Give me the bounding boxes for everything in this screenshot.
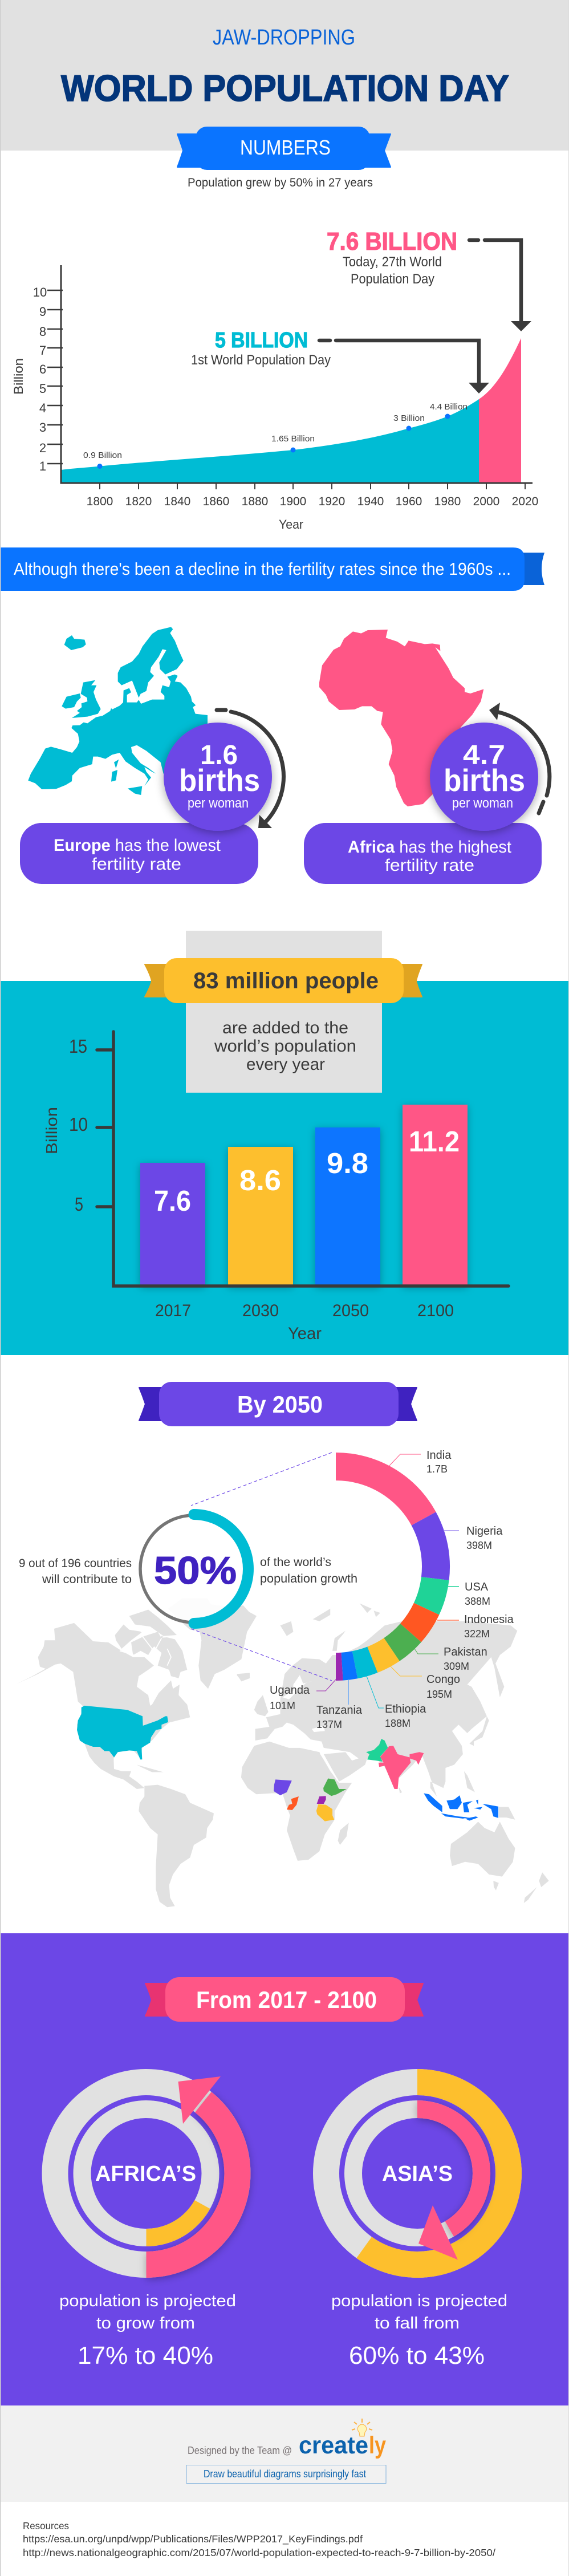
y labels: 9	[39, 305, 46, 319]
gray text card: are added to the	[222, 1019, 348, 1037]
country: nigeria	[274, 1779, 292, 1795]
bar: 2030: 8.6	[239, 1164, 281, 1196]
y labels: 7	[39, 343, 46, 358]
country: uganda	[317, 1796, 326, 1804]
label: asia's: ASIA’S	[382, 2162, 453, 2186]
text: 9 of 196 countries	[19, 1557, 132, 1586]
map: americas and greenland	[16, 1598, 257, 1907]
world map	[16, 1598, 549, 1907]
panel: europe	[20, 627, 283, 884]
logo: creately	[299, 2419, 386, 2459]
area: historical population	[61, 399, 479, 483]
country: ethiopia	[323, 1779, 347, 1796]
bar chart: projected population	[43, 1032, 509, 1343]
y labels: 5	[39, 382, 46, 396]
outer arc: 60 percent	[356, 2069, 522, 2278]
ribbon: by 2050: By 2050	[237, 1391, 323, 1418]
donut chart: countries	[336, 1453, 450, 1681]
banner: fertility decline: Although there's been a decline in the fertility rates since the 1960s ...	[14, 559, 511, 579]
bar: 2017	[140, 1163, 205, 1286]
x labels: 2030	[242, 1301, 279, 1320]
ring: 50 percent	[140, 1515, 249, 1623]
bar: 2017: 7.6	[154, 1184, 191, 1217]
segment: pakistan	[384, 1624, 421, 1661]
label: congo: Congo	[426, 1673, 460, 1686]
data labels: 1.65 Billion	[271, 434, 315, 444]
y labels	[33, 285, 47, 473]
y labels: 6	[39, 362, 46, 376]
badge: 4.7 births: per woman	[452, 796, 513, 811]
label: usa: USA	[465, 1581, 489, 1593]
label: indonesia: Indonesia	[464, 1613, 514, 1626]
callout: 7.6 billion	[327, 228, 531, 331]
callout: 5 billion: 5 BILLION	[215, 328, 308, 352]
label: uganda: 101M	[270, 1700, 295, 1711]
y labels	[69, 1036, 88, 1215]
label box: europe: fertility rate	[92, 855, 181, 874]
segment: ethiopia	[352, 1647, 377, 1678]
data labels: 3 Billion	[393, 413, 425, 423]
label: indonesia: 322M	[464, 1628, 490, 1640]
callout: 7.6 billion: Today, 27th World	[343, 254, 442, 270]
x labels: 2000	[473, 495, 499, 508]
x labels: 2020	[512, 495, 538, 508]
callout: 7.6 billion: 7.6 BILLION	[327, 228, 457, 255]
ribbon: numbers: NUMBERS	[240, 136, 331, 159]
subheading: growth: Population grew by 50% in 27 years	[188, 176, 373, 189]
logo: creately: create	[299, 2432, 368, 2459]
segment: congo	[367, 1638, 400, 1673]
logo: creately: ly	[369, 2432, 386, 2459]
label: india	[389, 1449, 452, 1475]
tagline box	[186, 2465, 386, 2483]
donut: asia	[326, 2069, 522, 2278]
text: 9 of 196 countries: 9 out of 196 countries	[19, 1557, 132, 1570]
label: africa's: AFRICA’S	[95, 2162, 196, 2186]
x labels: 1940	[357, 495, 384, 508]
x axis title: Year	[288, 1324, 322, 1343]
label: usa: 388M	[465, 1596, 490, 1607]
label: india: 1.7B	[426, 1463, 448, 1475]
axes	[97, 1032, 509, 1286]
label box: europe: Europe has the lowest	[54, 836, 221, 855]
text: africa projection: 17% to 40%	[78, 2342, 213, 2370]
text: population growth	[260, 1556, 357, 1585]
segment: tanzania	[341, 1651, 357, 1681]
label: ethiopia: 188M	[385, 1718, 411, 1729]
label: uganda: Uganda	[270, 1684, 310, 1697]
map: eurasia, africa, oceania	[237, 1603, 549, 1903]
y axis title: Billion	[43, 1107, 60, 1154]
dashed connector lines	[191, 1453, 332, 1681]
x labels: 1920	[319, 495, 345, 508]
label: uganda	[270, 1680, 336, 1711]
ribbon: 83 million people: 83 million people	[193, 968, 379, 993]
label box: africa: fertility rate	[385, 856, 474, 875]
map: africa	[319, 630, 483, 806]
label: nigeria: 398M	[466, 1540, 492, 1551]
area: since first population day	[479, 338, 521, 483]
text: asia projection: 60% to 43%	[349, 2342, 485, 2370]
label: pakistan: Pakistan	[444, 1646, 487, 1658]
x labels	[87, 495, 538, 508]
label: tanzania: Tanzania	[316, 1704, 363, 1717]
ribbon: numbers	[177, 127, 391, 170]
y labels: 10	[69, 1114, 88, 1135]
kicker: jaw-dropping: JAW-DROPPING	[213, 26, 355, 50]
x labels: 1840	[164, 495, 190, 508]
country: usa	[77, 1706, 168, 1759]
donut: africa	[55, 2076, 250, 2278]
arrow head	[418, 2205, 458, 2259]
country: pakistan	[366, 1739, 388, 1762]
resources: https://esa.un.org/unpd/wpp/Publications/Files/WPP2017_KeyFindings.pdf	[23, 2533, 363, 2545]
badge: 4.7 births	[430, 723, 538, 831]
y axis title: Billion	[11, 358, 26, 395]
country: india	[379, 1746, 424, 1789]
y labels: 1	[39, 459, 46, 473]
label: indonesia	[437, 1613, 514, 1640]
x labels: 2050	[332, 1301, 369, 1320]
banner: fertility decline	[0, 547, 544, 591]
footer band	[0, 2405, 569, 2502]
data points	[97, 414, 450, 469]
bar: 2050: 9.8	[327, 1147, 368, 1179]
y labels: 3	[39, 420, 46, 435]
segment: india	[336, 1453, 436, 1526]
badge: 1.6 births: 1.6	[200, 740, 238, 770]
gray text card: every year	[246, 1055, 325, 1074]
x labels: 1960	[396, 495, 422, 508]
y labels: 8	[39, 324, 46, 339]
bar: 2030	[228, 1147, 293, 1286]
x labels: 1820	[125, 495, 152, 508]
x labels	[155, 1301, 454, 1320]
label: ethiopia	[367, 1676, 426, 1729]
ribbon: by 2050	[139, 1382, 417, 1426]
donut labels	[270, 1449, 514, 1730]
outer arc: 40 percent	[146, 2092, 250, 2278]
label: pakistan	[413, 1646, 487, 1672]
country: tanzania	[316, 1804, 334, 1822]
bar: 2050	[315, 1127, 380, 1286]
badge: 4.7 births: 4.7	[463, 740, 505, 770]
segment: uganda	[336, 1653, 343, 1681]
badge: 1.6 births: per woman	[188, 796, 249, 811]
arrow to 1987	[319, 340, 489, 394]
x labels: 1880	[242, 495, 268, 508]
x labels: 1860	[203, 495, 229, 508]
country: indonesia	[424, 1793, 498, 1821]
text: population growth: population growth	[260, 1572, 357, 1585]
bar: 2100	[403, 1105, 468, 1286]
x labels: 1980	[434, 495, 461, 508]
arrow to 2017	[469, 240, 531, 331]
resources: http://news.nationalgeographic.com/2015/07/world-population-expected-to-reach-9-7-billion-by-2050/	[23, 2547, 495, 2558]
inner arc: 43 percent	[417, 2100, 490, 2237]
label: ethiopia: Ethiopia	[385, 1703, 426, 1715]
label: tanzania	[316, 1680, 363, 1730]
y labels: 4	[39, 401, 46, 415]
label box: africa: Africa has the highest	[348, 838, 512, 857]
text: africa projection	[59, 2292, 236, 2370]
resources: Resources	[23, 2520, 69, 2532]
label: pakistan: 309M	[444, 1661, 469, 1672]
label: india: India	[426, 1449, 452, 1462]
badge: 1.6 births: births	[179, 762, 260, 798]
y labels: 5	[75, 1194, 83, 1215]
label: congo	[390, 1666, 460, 1700]
inner arc: 17 percent	[146, 2200, 210, 2246]
header band	[0, 0, 569, 151]
data labels: 4.4 Billion	[430, 402, 468, 412]
ribbon: from 2017 - 2100	[145, 1977, 423, 2022]
segment: indonesia	[400, 1603, 439, 1642]
label: tanzania: 137M	[316, 1719, 342, 1730]
callout: 5 billion: 1st World Population Day	[191, 352, 331, 368]
tagline box: Draw beautiful diagrams surprisingly fast	[204, 2468, 366, 2480]
y labels: 2	[39, 441, 46, 455]
ribbon: 83 million people	[145, 958, 422, 1003]
label: usa	[448, 1581, 490, 1607]
x labels: 2017	[155, 1301, 191, 1320]
bar: 2100: 11.2	[409, 1125, 460, 1158]
arrow head	[178, 2076, 221, 2124]
panel: teal section	[0, 981, 569, 1355]
callout: 7.6 billion: Population Day	[351, 271, 434, 287]
gray text card	[186, 931, 382, 1093]
segment: nigeria	[412, 1512, 450, 1580]
map: europe	[28, 627, 208, 795]
panel: purple section	[0, 1933, 569, 2405]
label box: africa	[304, 823, 542, 884]
text: asia projection	[331, 2292, 507, 2370]
label: congo: 195M	[426, 1689, 452, 1700]
data labels: 0.9 Billion	[83, 451, 122, 460]
arrow: europe arc	[217, 710, 283, 828]
text: asia projection: population is projected	[331, 2292, 507, 2310]
resources	[23, 2520, 495, 2558]
x labels: 2100	[417, 1301, 454, 1320]
text: population growth: of the world’s	[260, 1556, 331, 1569]
text: africa projection: to grow from	[96, 2314, 195, 2332]
area chart: world population	[11, 265, 538, 532]
badge: 4.7 births: births	[444, 762, 525, 798]
badge: 1.6 births	[164, 723, 272, 831]
ribbon: from 2017 - 2100: From 2017 - 2100	[196, 1986, 377, 2013]
arrow: africa arc	[489, 703, 550, 813]
countries: highlighted	[274, 1739, 498, 1822]
label box: europe	[20, 823, 258, 884]
label: nigeria: Nigeria	[466, 1525, 503, 1538]
x labels: 1800	[87, 495, 113, 508]
country: congo	[287, 1796, 299, 1810]
icon: light bulb	[352, 2419, 372, 2436]
x labels: 1900	[280, 495, 306, 508]
credit: Designed by the Team @	[188, 2445, 292, 2456]
gray text card: world’s population	[214, 1037, 356, 1056]
x axis title: Year	[279, 517, 303, 532]
callout: 5 billion	[191, 328, 489, 394]
segment: usa	[414, 1577, 449, 1615]
ring: 50 percent: 50%	[154, 1549, 237, 1592]
text: africa projection: population is projected	[59, 2292, 236, 2310]
text: asia projection: to fall from	[375, 2314, 460, 2332]
y labels: 15	[69, 1036, 87, 1057]
title: WORLD POPULATION DAY	[61, 67, 509, 109]
text: 9 of 196 countries: will contribute to	[42, 1573, 132, 1586]
data labels	[83, 402, 468, 460]
label: nigeria	[444, 1525, 503, 1551]
y labels: 10	[33, 285, 47, 299]
axes	[47, 265, 533, 489]
panel: africa	[304, 630, 550, 884]
